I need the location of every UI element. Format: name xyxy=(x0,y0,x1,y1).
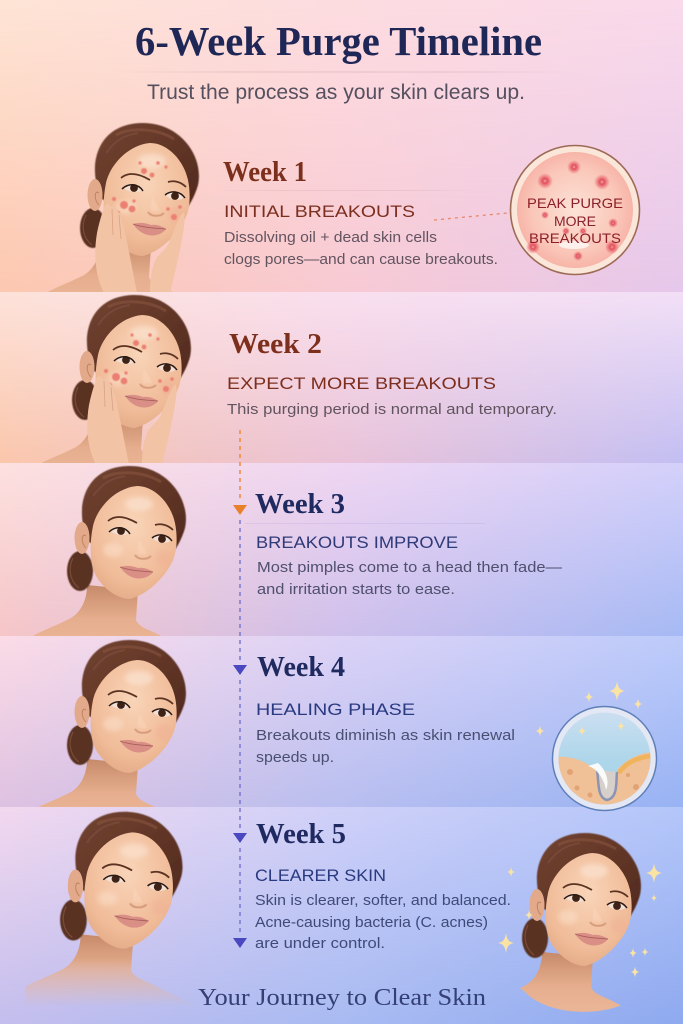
text block: week 4 xyxy=(256,701,515,766)
portrait: week 1 with acne and hands xyxy=(46,123,236,327)
heading: week 1: Week 1 xyxy=(223,157,307,188)
text block: week 5: Skin is clearer, softer, and balanced. xyxy=(255,892,511,909)
portrait: week 4 xyxy=(33,640,223,844)
text block: week 2 xyxy=(227,375,557,418)
heading: week 5: Week 5 xyxy=(256,819,346,850)
text block: week 1: Dissolving oil + dead skin cells xyxy=(224,229,437,246)
panel: week 5 background xyxy=(0,807,683,1024)
callout: peak purge: MORE xyxy=(554,213,596,229)
panel: week 2 background xyxy=(0,292,683,463)
text block: week 1: clogs pores—and can cause breakouts. xyxy=(224,251,498,268)
portrait: week 2 with acne and hands xyxy=(38,295,228,499)
heading: week 3: Week 3 xyxy=(255,489,345,520)
text block: week 4: speeds up. xyxy=(256,749,334,766)
text block: week 5: are under control. xyxy=(255,935,385,952)
timeline arrow: week 5 end xyxy=(233,848,247,948)
callout: peak purge: BREAKOUTS xyxy=(529,230,621,246)
timeline arrow: week 3 to 4 xyxy=(233,520,247,675)
title: 6-Week Purge Timeline xyxy=(135,18,542,64)
panel: week 1 background xyxy=(0,0,683,292)
portrait: week 5 xyxy=(25,810,189,1002)
connector to callout xyxy=(434,213,508,220)
callout: peak purge: PEAK PURGE xyxy=(527,195,623,211)
text block: week 2: This purging period is normal and temporary. xyxy=(227,401,557,418)
timeline arrow: week 2 to 3 xyxy=(233,430,247,515)
panel: week 3 background xyxy=(0,463,683,636)
footer line: Your Journey to Clear Skin xyxy=(198,985,486,1011)
text block: week 3: and irritation starts to ease. xyxy=(257,581,455,598)
text block: week 4: Breakouts diminish as skin renewal xyxy=(256,727,515,744)
text block: week 3 xyxy=(256,534,562,598)
text block: week 5 xyxy=(255,867,511,952)
callout: peak purge xyxy=(510,146,640,274)
heading: week 2: Week 2 xyxy=(229,329,322,360)
portrait: final clear skin xyxy=(520,832,642,1012)
subtitle: Trust the process as your skin clears up. xyxy=(147,81,525,104)
panel: week 4 background xyxy=(0,636,683,807)
text block: week 2: EXPECT MORE BREAKOUTS xyxy=(227,375,496,393)
text block: week 4: HEALING PHASE xyxy=(256,701,415,719)
icon: sparkles around final portrait xyxy=(498,863,662,978)
text block: week 1 xyxy=(224,203,498,268)
timeline arrow: week 4 to 5 xyxy=(233,680,247,843)
heading: week 4: Week 4 xyxy=(257,652,345,683)
text block: week 1: INITIAL BREAKOUTS xyxy=(224,203,415,221)
icon: skin renewal circle xyxy=(550,705,660,815)
text block: week 3: Most pimples come to a head then fade— xyxy=(257,559,562,576)
text block: week 5: CLEARER SKIN xyxy=(255,867,386,885)
portrait: week 3 xyxy=(33,466,223,670)
text block: week 3: BREAKOUTS IMPROVE xyxy=(256,534,458,552)
icon: sparkles around skin circle xyxy=(536,681,642,736)
text block: week 5: Acne-causing bacteria (C. acnes) xyxy=(255,914,488,931)
